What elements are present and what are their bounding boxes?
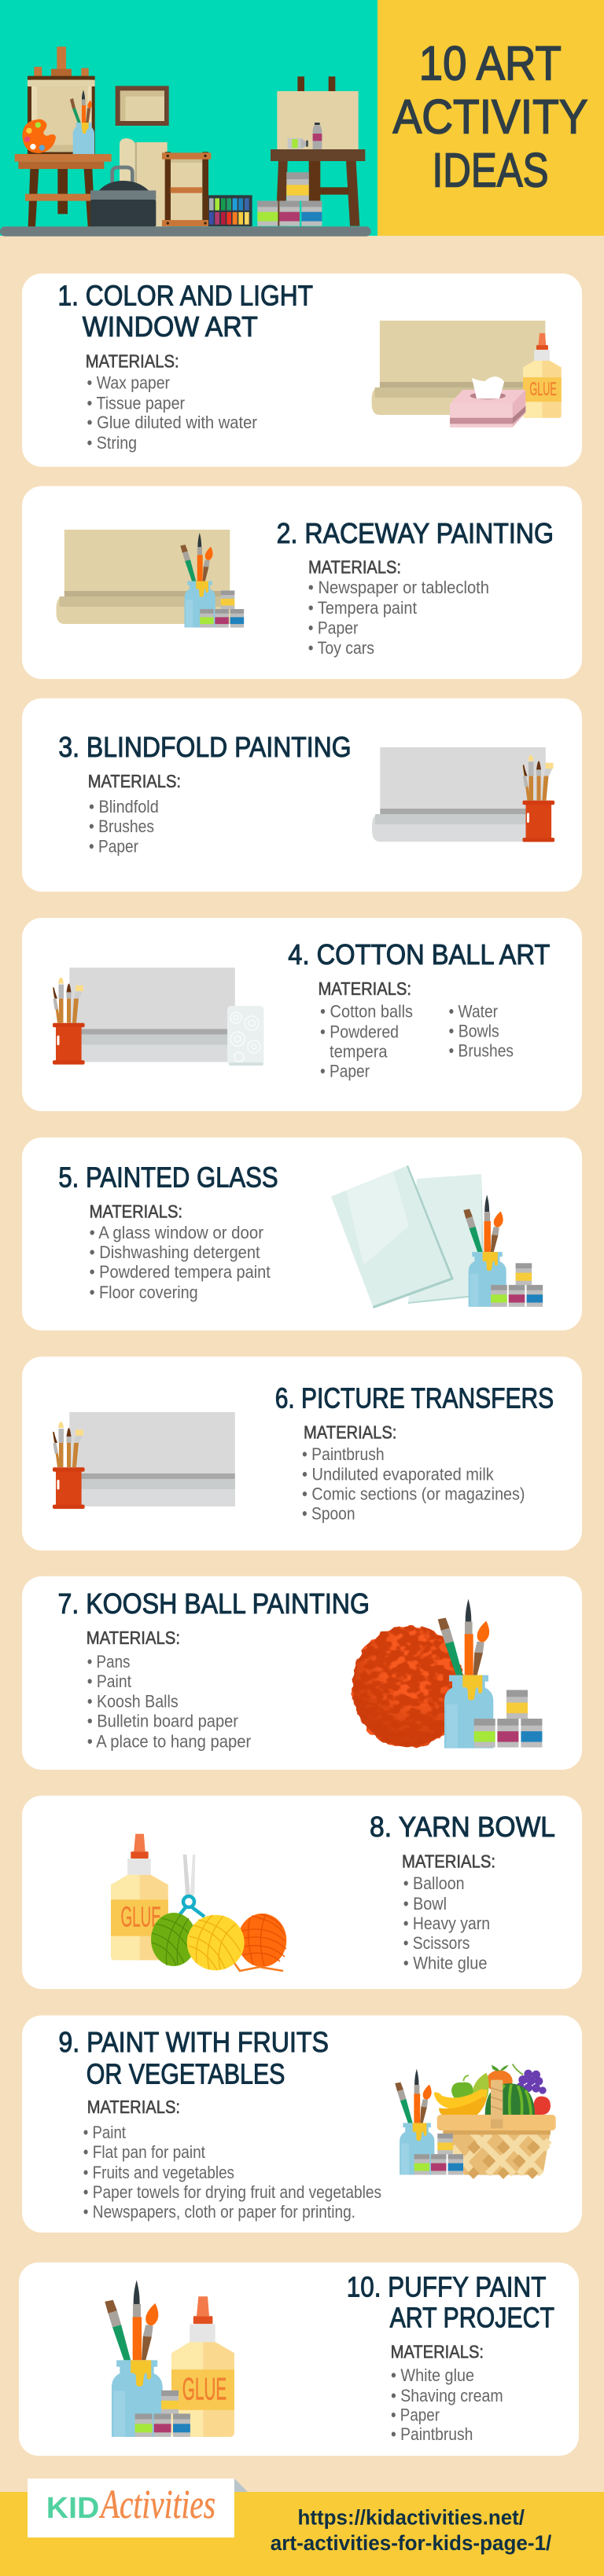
materials heading: MATERIALS: <box>318 978 411 999</box>
materials list: • Paper <box>308 618 358 637</box>
jar of brushes <box>70 90 94 155</box>
materials list: • White glue <box>403 1954 488 1973</box>
heading: 2. RACEWAY PAINTING <box>277 517 554 549</box>
panel: header illustration <box>0 0 378 237</box>
materials list: • Tissue paper <box>87 393 185 413</box>
illustration: glue bottle, brush jar and paints <box>105 2281 234 2437</box>
illustration: grey paper and brush cup <box>372 747 554 842</box>
materials list: • White glue <box>391 2365 474 2385</box>
heading: OR VEGETABLES <box>87 2057 285 2090</box>
materials heading: MATERIALS: <box>308 556 401 577</box>
panel: activity 6 <box>22 1356 582 1550</box>
heading: WINDOW ART <box>83 310 258 343</box>
illustration: glass panes with brush jar and paints <box>331 1165 543 1308</box>
panel: header title: IDEAS <box>433 143 549 196</box>
materials heading: MATERIALS: <box>88 771 181 791</box>
materials list: • Paintbrush <box>391 2424 473 2444</box>
source url: https://kidactivities.net/ <box>297 2506 525 2530</box>
materials list: • Floor covering <box>90 1282 198 1302</box>
palette <box>22 119 56 153</box>
pastels box <box>208 195 252 226</box>
materials list: • Tempera paint <box>308 598 417 618</box>
materials list: • Brushes <box>89 816 154 836</box>
heading: ART PROJECT <box>390 2302 554 2334</box>
basket handle <box>491 2080 503 2128</box>
materials heading: MATERIALS: <box>402 1851 495 1871</box>
materials list: • Glue diluted with water <box>87 413 257 432</box>
heading: 8. YARN BOWL <box>370 1811 555 1843</box>
heading: 1. COLOR AND LIGHT <box>58 279 313 311</box>
heading <box>58 279 313 343</box>
logo: Activities <box>99 2482 215 2527</box>
illustration: koosh ball with brush jar and paints <box>352 1599 542 1749</box>
materials list: • Paint <box>87 1671 131 1691</box>
logo: KID <box>46 2492 99 2525</box>
panel: activity 9 <box>22 2016 582 2233</box>
illustration: grey paper, brush cup and cotton jar <box>53 967 264 1066</box>
right stool <box>271 149 365 226</box>
small wooden frame <box>162 152 211 226</box>
heading: 6. PICTURE TRANSFERS <box>275 1382 554 1414</box>
materials list: tempera <box>330 1042 388 1062</box>
materials list: • Scissors <box>403 1933 470 1953</box>
paint tubes <box>257 172 322 226</box>
left easel and canvas <box>28 46 95 154</box>
materials list: • A place to hang paper <box>87 1732 251 1752</box>
illustration: glue, scissors and yarn balls: GLUE <box>120 1901 161 1932</box>
panel: header title: ACTIVITY <box>393 90 588 143</box>
materials list <box>302 1444 525 1524</box>
materials list: • Paper <box>320 1062 370 1081</box>
materials list <box>308 578 489 658</box>
left studio group <box>15 46 169 226</box>
panel: activity 8 <box>22 1796 582 1989</box>
illustration: paper roll, glue and tissue box <box>372 321 562 427</box>
materials list: • Koosh Balls <box>87 1691 179 1712</box>
materials list: • Newspapers, cloth or paper for printing. <box>83 2202 355 2222</box>
illustration: brush jar, paints and fruit basket <box>395 2064 556 2179</box>
materials list: • Fruits and vegetables <box>83 2163 234 2182</box>
right studio group <box>162 76 365 226</box>
heading: 7. KOOSH BALL PAINTING <box>58 1587 370 1620</box>
materials heading: MATERIALS: <box>86 351 179 372</box>
panel: activity 2 <box>22 486 582 679</box>
heading <box>347 2270 554 2334</box>
materials heading: MATERIALS: <box>304 1422 396 1443</box>
heading: 10. PUFFY PAINT <box>347 2270 546 2303</box>
materials list <box>320 1001 514 1081</box>
footer band <box>0 2479 604 2576</box>
materials list: • Undiluted evaporated milk <box>302 1465 495 1484</box>
illustration: glue bottle, brush jar and paints: GLUE <box>182 2372 226 2406</box>
panel: header title: 10 ART <box>419 36 562 90</box>
materials list: • Water <box>448 1001 498 1021</box>
heading: 4. COTTON BALL ART <box>288 938 550 971</box>
materials list <box>90 1223 271 1302</box>
materials list <box>87 1652 251 1752</box>
materials list: • Bulletin board paper <box>87 1712 238 1730</box>
materials heading: MATERIALS: <box>391 2342 484 2362</box>
illustration: glue, scissors and yarn balls <box>111 1834 286 1971</box>
materials list <box>87 372 257 453</box>
materials list: • Paintbrush <box>302 1444 385 1464</box>
materials list <box>403 1873 490 1973</box>
materials list: • Pans <box>87 1652 131 1671</box>
materials list: • Blindfold <box>89 797 159 816</box>
panel: activity 1 <box>22 273 582 467</box>
panel: activity 7 <box>22 1576 582 1770</box>
materials heading: MATERIALS: <box>87 1627 180 1648</box>
materials list: • Paper <box>391 2405 440 2425</box>
panel: activity 3 <box>22 699 582 892</box>
right canvas <box>277 76 359 149</box>
materials list: • Wax paper <box>87 372 170 393</box>
materials list <box>83 2123 381 2222</box>
art bag <box>90 167 156 226</box>
materials list: • Brushes <box>448 1040 514 1060</box>
materials list: • Shaving cream <box>391 2386 503 2405</box>
materials list: • Paint <box>83 2123 126 2142</box>
materials list: • A glass window or door <box>90 1223 263 1242</box>
panel: activity 4 <box>22 918 582 1111</box>
illustration: grey paper and brush cup <box>53 1412 235 1509</box>
materials list: • Dishwashing detergent <box>90 1242 260 1262</box>
materials list: • Paper <box>89 837 138 857</box>
materials list: • String <box>87 433 137 453</box>
materials list: • Toy cars <box>308 638 374 658</box>
materials list: • Comic sections (or magazines) <box>302 1484 525 1504</box>
materials list <box>89 797 159 857</box>
materials list: • Paper towels for drying fruit and vegetables <box>83 2182 381 2202</box>
illustration: paper roll with brush jar and paints <box>57 530 244 628</box>
materials list: • Bowls <box>448 1021 499 1040</box>
materials heading: MATERIALS: <box>90 1201 182 1221</box>
fold triangle <box>234 2479 248 2492</box>
left table <box>15 154 112 226</box>
materials list: • Cotton balls <box>320 1001 413 1021</box>
basket <box>437 2115 556 2179</box>
materials list: • Bowl <box>403 1894 447 1914</box>
heading: 5. PAINTED GLASS <box>58 1161 278 1194</box>
heading: 3. BLINDFOLD PAINTING <box>58 731 352 763</box>
logo <box>28 2479 234 2537</box>
materials list: • Balloon <box>403 1873 465 1893</box>
heading: 9. PAINT WITH FRUITS <box>58 2026 329 2058</box>
panel: activity 5 <box>22 1138 582 1330</box>
fruit <box>434 2064 551 2115</box>
paper roll <box>120 138 168 226</box>
materials list: • Newspaper or tablecloth <box>308 578 489 597</box>
materials list: • Spoon <box>302 1504 355 1524</box>
heading <box>58 2026 329 2090</box>
materials heading: MATERIALS: <box>87 2097 180 2117</box>
source url: art-activities-for-kids-page-1/ <box>271 2531 552 2555</box>
materials list <box>391 2365 503 2444</box>
wall frame <box>116 86 169 126</box>
materials list: • Powdered tempera paint <box>90 1262 271 1282</box>
materials list: • Flat pan for paint <box>83 2142 205 2162</box>
panel: header title <box>378 0 604 236</box>
source url <box>271 2506 552 2555</box>
panel: activity 10 <box>19 2262 579 2456</box>
floor shelf <box>0 226 371 237</box>
illustration: paper roll, glue and tissue box: GLUE <box>529 379 557 400</box>
materials list: • Heavy yarn <box>403 1914 490 1933</box>
materials list: • Powdered <box>320 1022 399 1041</box>
